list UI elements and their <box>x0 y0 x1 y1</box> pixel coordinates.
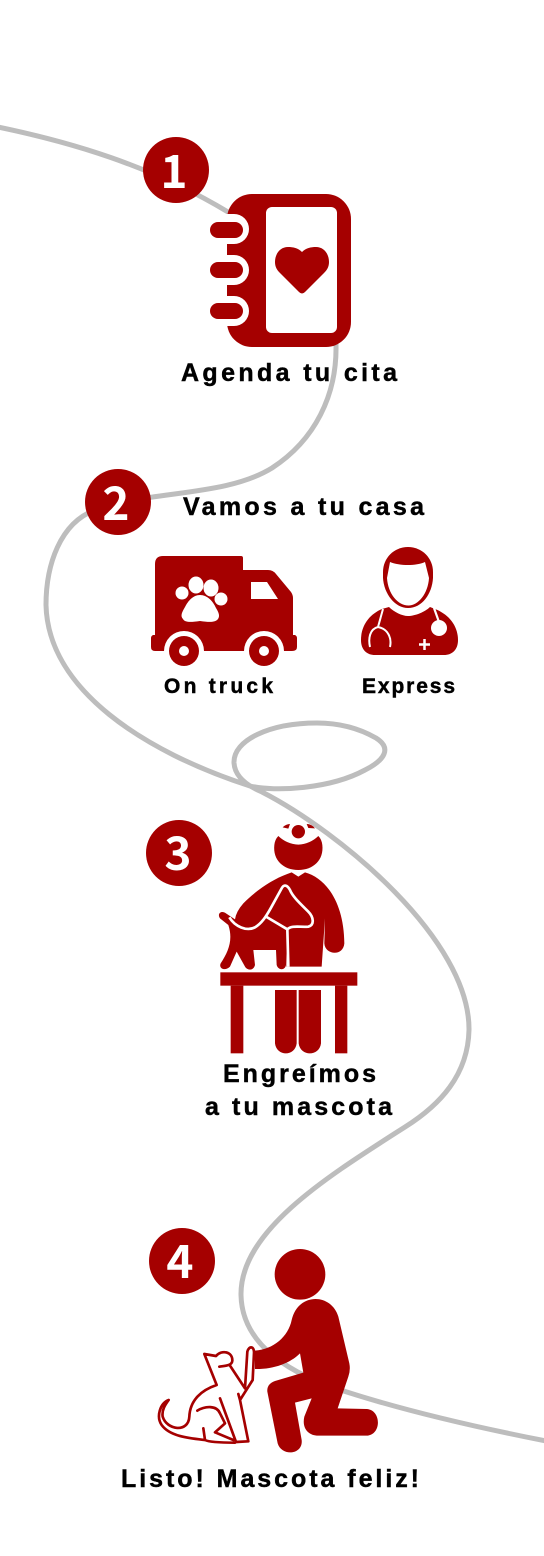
icon: vet examining a dog on table <box>219 824 357 1053</box>
step 3 badge: 3 <box>164 818 192 884</box>
heading: a tu mascota: a tu mascota <box>205 1093 393 1121</box>
label: Express: Express <box>362 675 455 698</box>
step 2 badge: 2 <box>102 468 130 534</box>
step 3 badge <box>146 818 212 886</box>
icon: doctor with stethoscope <box>361 547 458 655</box>
step 4 badge: 4 <box>166 1226 194 1292</box>
heading: Vamos a tu casa: Vamos a tu casa <box>183 493 425 521</box>
step 4 badge <box>149 1226 215 1294</box>
icon: vet truck with paw <box>151 556 297 671</box>
heading: Engreímos: Engreímos <box>223 1060 376 1088</box>
step 1 badge: 1 <box>160 136 188 202</box>
heading: Listo! Mascota feliz!: Listo! Mascota feliz! <box>121 1465 419 1493</box>
step 1 badge <box>143 136 209 203</box>
label: On truck: On truck <box>164 675 273 698</box>
heading: Agenda tu cita: Agenda tu cita <box>181 359 398 387</box>
step 2 badge <box>85 468 151 535</box>
icon: notebook with heart <box>200 194 351 347</box>
icon: person kneeling with dog <box>159 1249 378 1452</box>
